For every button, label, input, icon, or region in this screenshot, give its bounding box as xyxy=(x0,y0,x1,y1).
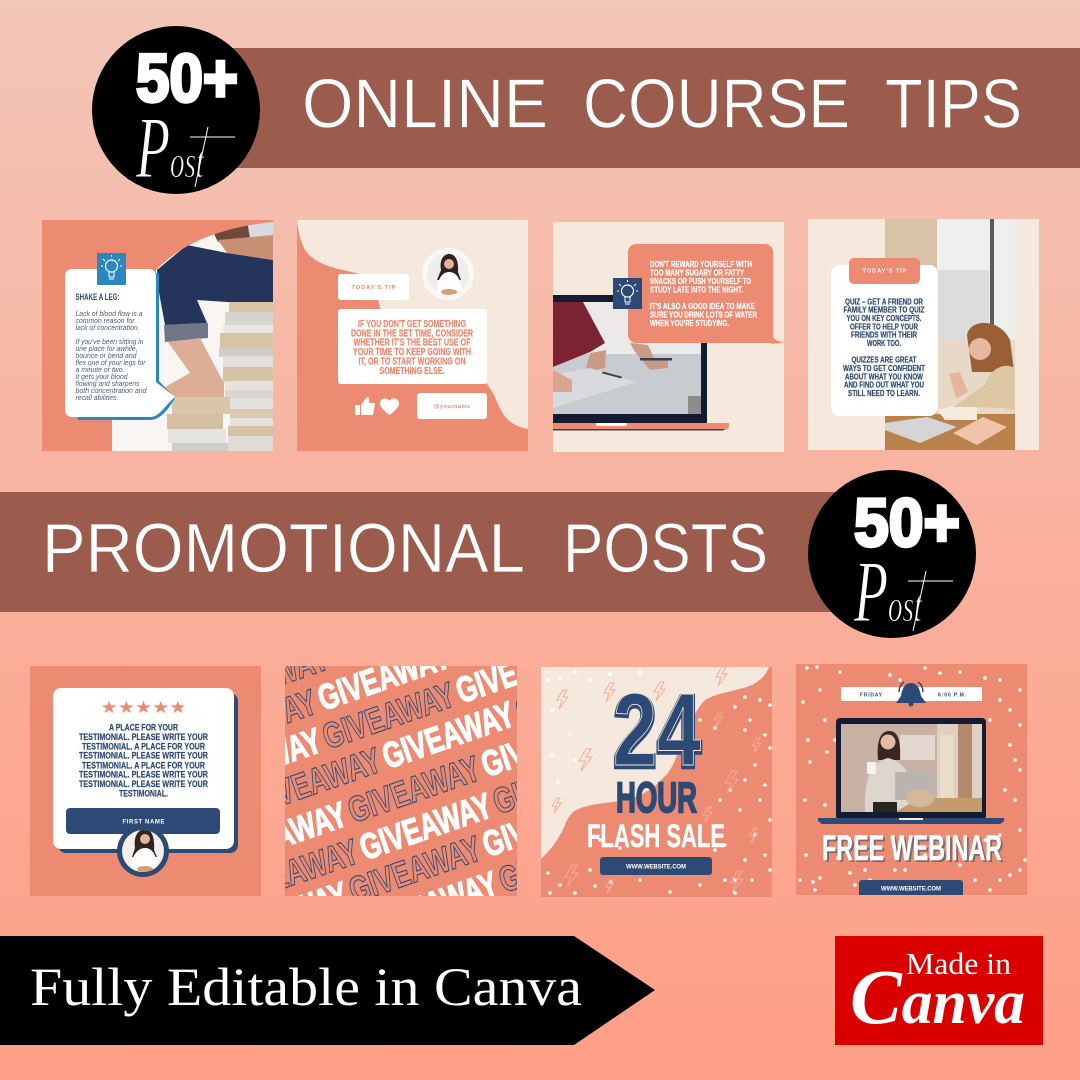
label: hour: HOUR xyxy=(616,774,697,822)
speech bubble tip: WHEN YOU'RE STUDYING. xyxy=(650,318,729,328)
panel: shake a leg tip xyxy=(42,220,273,451)
panel: giveaway pattern: GIVEAWAY xyxy=(510,647,653,731)
date bar: 6:00 P.M. xyxy=(938,692,967,698)
quiz text card: WAYS TO GET CONFIDENT xyxy=(843,363,926,373)
panel: giveaway pattern: GIVEAWAY xyxy=(477,782,620,865)
name bar xyxy=(66,808,220,834)
label: flash sale: FLASH SALE xyxy=(587,818,725,854)
today's tip label: TODAY'S TIP xyxy=(352,285,396,291)
speech bubble tip: TOO MANY SUGARY OR FATTY xyxy=(650,268,744,278)
ribbon: fully editable in canva xyxy=(0,936,655,1045)
panel: giveaway pattern: GIVEAWAY xyxy=(209,793,352,877)
badge: 50+ post top: 50+ xyxy=(136,40,238,116)
name bar: FIRST NAME xyxy=(122,820,164,826)
panel: giveaway pattern: GIVEAWAY xyxy=(184,720,327,803)
quiz text card: WORK TOO. xyxy=(867,338,901,348)
panel: giveaway pattern: GIVEAWAY xyxy=(360,863,503,946)
card: shake a leg text: one place for awhile, xyxy=(76,344,138,353)
card: shake a leg text: common reason for xyxy=(76,316,135,325)
speech bubble tip: SNACKS OR PUSH YOURSELF TO xyxy=(650,276,751,286)
badge: 50+ post middle: 50+ xyxy=(854,485,960,561)
confetti dots xyxy=(800,667,1025,890)
panel: giveaway pattern: GIVEAWAY xyxy=(493,817,636,901)
speech bubble tip: DON'T REWARD YOURSELF WITH xyxy=(650,259,752,269)
website bar xyxy=(600,857,712,875)
label: free webinar xyxy=(822,829,1004,870)
username label: @yourname xyxy=(434,404,470,410)
today's tip tab xyxy=(849,258,920,284)
tip text card: WHETHER IT'S THE BEST USE OF xyxy=(354,338,470,348)
panel: 24 hour flash sale xyxy=(541,667,772,897)
quiz text card xyxy=(831,265,938,416)
ribbon: fully editable in canva: Fully Editable in Canva xyxy=(30,957,582,1017)
panel: testimonial xyxy=(30,666,261,896)
panel: giveaway pattern: GIVEAWAY xyxy=(221,831,364,914)
quiz text card: STILL NEED TO LEARN. xyxy=(848,388,920,398)
badge: 50+ post middle: Post xyxy=(853,544,923,641)
photo: person on book stack xyxy=(112,220,273,451)
icon: lightbulb navy xyxy=(613,278,642,309)
testimonial text xyxy=(79,722,208,800)
icon: heart xyxy=(380,398,399,415)
tip text card: IF YOU DON'T GET SOMETHING xyxy=(358,319,466,330)
testimonial text: TESTIMONIAL. PLEASE WRITE YOUR xyxy=(79,779,208,790)
panel: giveaway pattern: GIVEAWAY xyxy=(179,681,322,764)
testimonial text: TESTIMONIAL. A PLACE FOR YOUR xyxy=(82,760,205,771)
testimonial text: TESTIMONIAL. PLEASE WRITE YOUR xyxy=(79,751,208,762)
today's tip tab: TODAY'S TIP xyxy=(862,268,907,274)
quiz text card: ABOUT WHAT YOU KNOW xyxy=(845,371,924,381)
panel: giveaway pattern: GIVEAWAY xyxy=(324,591,467,674)
banner: online course tips xyxy=(225,48,1080,168)
heading: online course tips xyxy=(302,64,1022,142)
heading: online course tips: ONLINE xyxy=(302,64,548,142)
quiz text card: QUIZ – GET A FRIEND OR xyxy=(845,296,923,306)
testimonial text: A PLACE FOR YOUR xyxy=(109,722,178,733)
heading: promotional posts: POSTS xyxy=(563,509,768,587)
heading: promotional posts: PROMOTIONAL xyxy=(42,509,525,587)
badge: 50+ post middle xyxy=(808,470,976,641)
panel: giveaway pattern: GIVEAWAY xyxy=(450,628,593,711)
card: shake a leg text: bounce or bend and xyxy=(76,351,137,360)
panel: giveaway pattern: GIVEAWAY xyxy=(210,873,353,957)
card: shake a leg text: If you've been sitting in xyxy=(76,337,144,346)
quiz text card: OFFER TO HELP YOUR xyxy=(850,321,918,331)
card: shake a leg text: flowing and sharpens xyxy=(76,379,140,388)
photo: woman studying xyxy=(885,219,1015,450)
panel: giveaway pattern: GIVEAWAY xyxy=(476,702,619,785)
avatar: woman xyxy=(422,248,474,300)
panel: giveaway pattern: GIVEAWAY xyxy=(488,739,630,822)
website bar xyxy=(859,880,963,895)
panel: giveaway pattern: GIVEAWAY xyxy=(342,747,485,831)
website bar: WWW.WEBSITE.COM xyxy=(626,864,686,870)
panel: giveaway pattern: GIVEAWAY xyxy=(312,635,455,719)
speech bubble tip: IT'S ALSO A GOOD IDEA TO MAKE xyxy=(650,301,755,311)
star rating: ★★★★★ xyxy=(100,698,186,718)
banner: promotional posts xyxy=(0,492,850,612)
quiz text card: FAMILY MEMBER TO QUIZ xyxy=(844,305,924,315)
card: shake a leg text: Lack of blood flow is a xyxy=(76,309,143,318)
tip text card: DONE IN THE SET TIME, CONSIDER xyxy=(351,328,474,340)
icon: lightbulb blue xyxy=(97,253,126,285)
panel: giveaway pattern: GIVEAWAY xyxy=(191,637,334,720)
card: shake a leg text: SHAKE A LEG: xyxy=(76,292,120,303)
card: shake a leg text: recall abilities. xyxy=(76,393,119,402)
quiz text card: QUIZZES ARE GREAT xyxy=(852,355,917,365)
panel: giveaway pattern: GIVEAWAY xyxy=(354,785,497,868)
speech bubble tip: STUDY LATE INTO THE NIGHT. xyxy=(650,284,743,294)
laptop with photo xyxy=(818,718,1004,824)
card: shake a leg text: flex one of your legs for xyxy=(76,358,146,367)
tip text card xyxy=(338,309,487,384)
speech bubble tip xyxy=(628,244,784,344)
panel: quiz tip xyxy=(808,219,1039,450)
date bar: FRIDAY xyxy=(860,692,883,698)
lightning icons xyxy=(552,667,761,893)
icon: bell xyxy=(896,682,926,706)
confetti dots xyxy=(548,672,770,893)
card: shake a leg text xyxy=(65,269,175,420)
panel: giveaway pattern: GIVEAWAY xyxy=(377,693,520,777)
number 24: 24 xyxy=(613,672,701,787)
today's tip label xyxy=(338,274,409,300)
panel: giveaway pattern: GIVEAWAY xyxy=(446,589,588,673)
badge: made in canva xyxy=(835,936,1043,1045)
quiz text card: AND FIND OUT WHAT YOU xyxy=(844,380,924,390)
website bar: WWW.WEBSITE.COM xyxy=(881,886,941,892)
panel: giveaway pattern: GIVEAWAY xyxy=(317,674,460,757)
badge: made in canva: Made in xyxy=(906,946,1012,981)
testimonial text: TESTIMONIAL. xyxy=(119,789,168,800)
tip text card: YOUR TIME TO KEEP GOING WITH xyxy=(353,347,471,358)
card: shake a leg text: It gets your blood xyxy=(76,372,128,381)
panel: giveaway pattern: GIVEAWAY xyxy=(243,739,386,823)
card: shake a leg text: both concentration and xyxy=(76,386,147,395)
badge: 50+ post top xyxy=(92,26,260,197)
icon: thumbs up xyxy=(355,397,375,415)
username label xyxy=(417,393,487,419)
speech bubble tip: SURE YOU DRINK LOTS OF WATER xyxy=(650,310,757,320)
panel: giveaway pattern xyxy=(285,666,517,896)
laptop photo xyxy=(553,295,729,430)
badge: 50+ post top: Post xyxy=(135,100,205,197)
number 24: 24 xyxy=(613,674,701,789)
quiz text card: FRIENDS WITH THEIR xyxy=(851,330,917,340)
card: shake a leg text: lack of concentration. xyxy=(76,323,140,332)
avatar: testimonial woman xyxy=(117,825,169,877)
quiz text card: YOU ON KEY CONCEPTS. xyxy=(846,313,922,323)
testimonial text: TESTIMONIAL. PLEASE WRITE YOUR xyxy=(79,770,208,781)
tip text card: SOMETHING ELSE. xyxy=(380,366,445,377)
tip text card: IT, OR TO START WORKING ON xyxy=(358,356,466,368)
panel: don't reward yourself tip xyxy=(553,222,784,452)
panel: free webinar xyxy=(796,664,1027,895)
heading: online course tips: TIPS xyxy=(885,64,1022,142)
heading: online course tips: COURSE xyxy=(583,64,850,142)
panel: today's tip consider xyxy=(297,220,528,451)
card: shake a leg text: a minute or two. xyxy=(76,365,124,374)
testimonial text: TESTIMONIAL. A PLACE FOR YOUR xyxy=(82,741,205,752)
date bar xyxy=(841,687,982,701)
panel: giveaway pattern: GIVEAWAY xyxy=(344,827,486,911)
badge: made in canva: Canva xyxy=(850,953,1025,1040)
testimonial text: TESTIMONIAL. PLEASE WRITE YOUR xyxy=(79,732,208,743)
